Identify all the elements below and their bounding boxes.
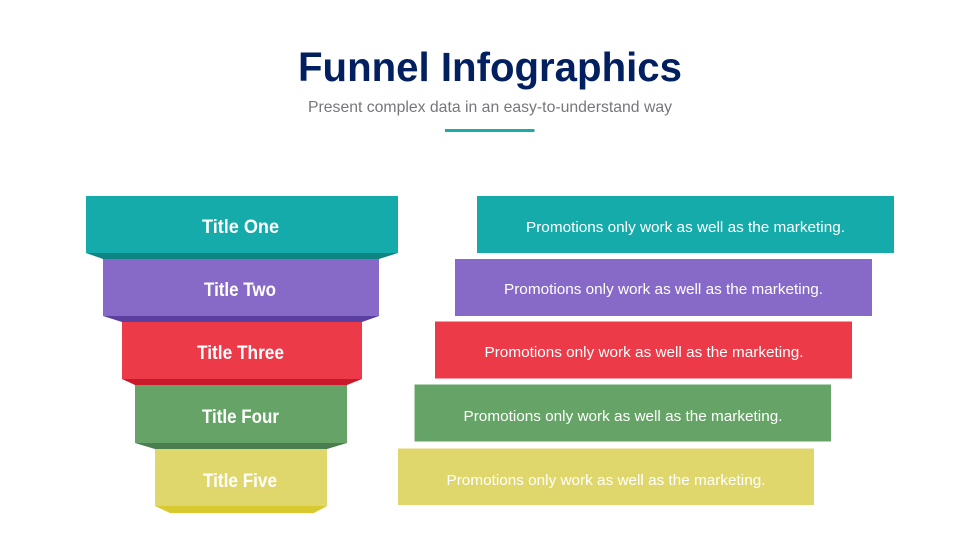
bar 2: Promotions only work as well as the marketing. [504,281,823,298]
funnel tier 5: Title Five [155,449,327,513]
bar 2 [455,259,872,316]
funnel tier 4: Title Four [135,385,347,449]
bar 5: Promotions only work as well as the marketing. [446,472,766,489]
bar 4: Promotions only work as well as the marketing. [464,408,782,425]
funnel tier 5: Title Five: Title Five [203,471,277,492]
bar 5 [398,448,814,505]
funnel tier 4: Title Four: Title Four [202,407,280,428]
funnel tier 2: Title Two [103,259,379,322]
bar 4 [414,384,831,442]
bar 3 [435,322,852,378]
bar 1: Promotions only work as well as the marketing. [526,219,845,236]
bar 3: Promotions only work as well as the marketing. [484,344,804,361]
subtitle: Present complex data in an easy-to-understand way [308,99,672,116]
funnel tier 3: Title Three [122,322,362,385]
title: Funnel Infographics [298,44,682,90]
bar 1 [477,196,894,253]
funnel [86,196,398,513]
title underline [445,129,534,132]
funnel tier 1: Title One [86,196,398,259]
funnel tier 2: Title Two: Title Two [204,280,276,301]
funnel tier 3: Title Three: Title Three [197,343,284,364]
text bars [398,196,894,505]
funnel tier 1: Title One: Title One [202,217,279,238]
